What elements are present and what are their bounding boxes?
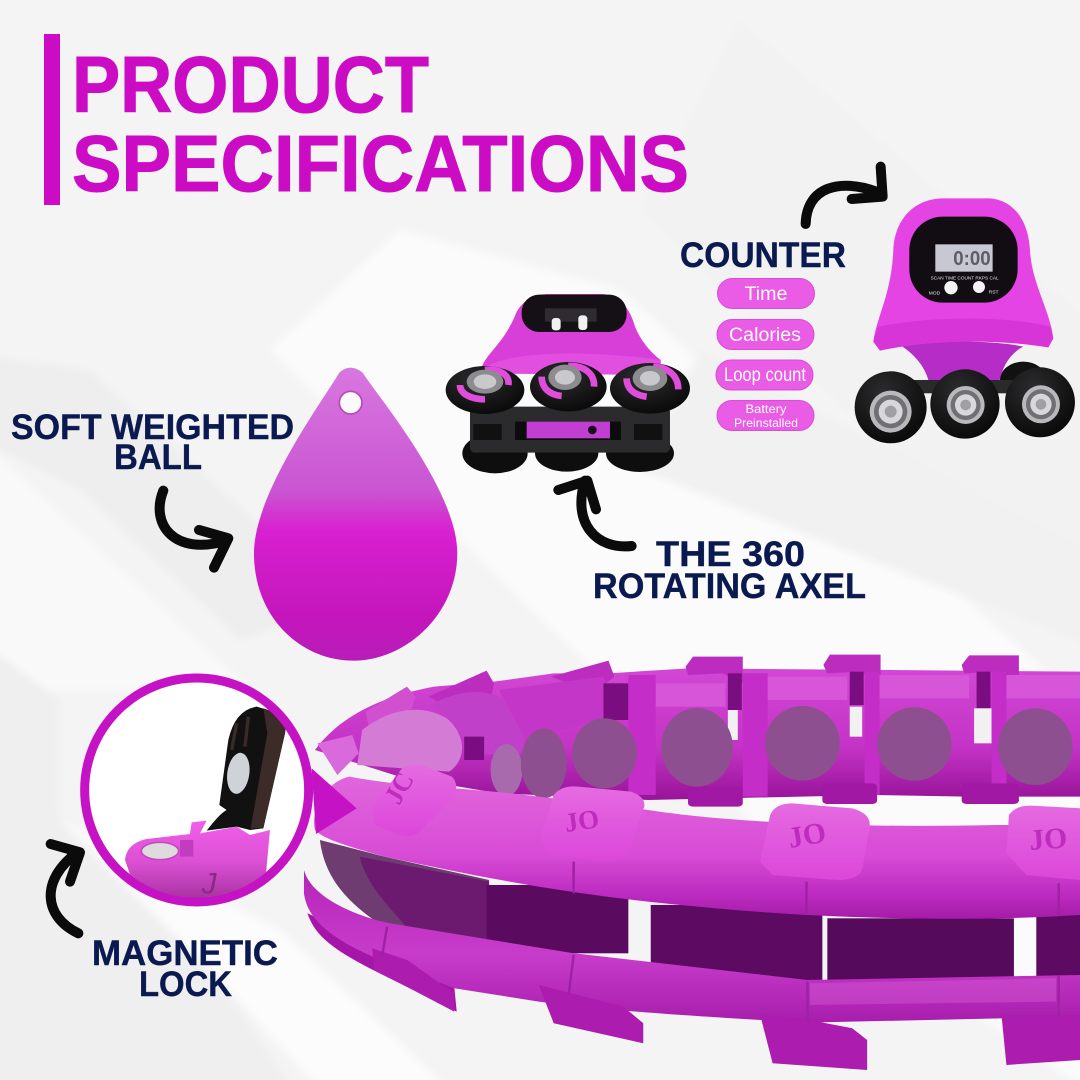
JO tile lettering: JC — [379, 767, 420, 809]
display housing — [909, 217, 1018, 303]
display — [522, 295, 627, 332]
counter device photo illustration: MOD — [929, 290, 941, 296]
pill: battery preinstalled: Battery — [746, 402, 786, 416]
title line 1: PRODUCT — [72, 40, 429, 129]
lock illustration — [125, 707, 285, 903]
lowest left rim — [307, 913, 457, 1012]
lcd labels: SCAN TIME COUNT RKPS CAL — [931, 276, 999, 281]
recesses — [464, 672, 991, 760]
rib highlights on back segments — [648, 675, 1080, 707]
frame — [470, 407, 670, 453]
hula hoop — [304, 655, 1080, 1070]
open flap — [207, 707, 285, 831]
rotating axel photo illustration — [446, 294, 690, 473]
label: the 360 rotating axel — [593, 535, 866, 606]
latch — [527, 422, 610, 438]
pill: time — [718, 278, 814, 308]
top tabs — [366, 655, 1019, 732]
label: magnetic lock: MAGNETIC — [92, 934, 278, 973]
ring and white disc — [85, 678, 309, 902]
buttons — [944, 281, 958, 294]
lower discs — [462, 433, 528, 473]
counter device photo illustration: RST — [989, 289, 999, 295]
wheels with rotation arrows — [446, 362, 690, 414]
label: the 360 rotating axel: ROTATING AXEL — [593, 567, 866, 606]
lower band — [304, 870, 1080, 1023]
lighter inner swirl — [357, 710, 462, 772]
bottom back tabs — [688, 783, 1019, 807]
band seams — [382, 862, 1059, 1022]
label: soft weighted ball: BALL — [114, 438, 202, 477]
wheels — [855, 367, 1075, 443]
gaps in back arc — [728, 707, 992, 743]
dark interior panels — [320, 840, 1080, 980]
buttons — [552, 318, 561, 330]
label: soft weighted ball: SOFT WEIGHTED — [11, 408, 294, 447]
label: the 360 rotating axel: THE 360 — [656, 535, 805, 574]
hula hoop: JO — [563, 803, 601, 838]
pill: loop count: Loop count — [724, 365, 807, 386]
label: magnetic lock — [92, 934, 278, 1004]
pointer triangle — [312, 768, 357, 834]
title line 2: SPECIFICATIONS — [72, 119, 689, 208]
lock illustration: J — [201, 867, 218, 900]
pill: calories — [717, 320, 814, 350]
lock base — [125, 821, 270, 903]
lcd — [935, 244, 993, 272]
pill: battery preinstalled: Preinstalled — [734, 416, 798, 430]
label: counter: COUNTER — [680, 236, 846, 275]
flap magnet — [227, 752, 250, 794]
back arc of hoop — [315, 668, 1080, 800]
hula hoop: JO — [1028, 822, 1068, 857]
lower tabs — [372, 948, 1080, 1070]
title accent bar — [44, 34, 60, 205]
arrow: to magnetic lock — [51, 844, 80, 933]
weighted ball — [254, 368, 457, 661]
JO tile shapes — [317, 735, 1080, 880]
magnetic lock callout — [85, 678, 357, 903]
body — [873, 198, 1053, 351]
title — [44, 34, 689, 208]
neck — [900, 341, 1023, 387]
pill: calories: Calories — [729, 325, 801, 346]
hula hoop: JO — [786, 817, 829, 855]
weighted balls — [491, 706, 1073, 798]
counter device photo illustration: 0:00 — [953, 247, 991, 270]
rear wheel — [1000, 362, 1047, 398]
arrow: to counter — [806, 167, 883, 224]
pill: time: Time — [744, 284, 788, 305]
segment bands — [628, 672, 1006, 797]
axle bar — [900, 380, 1040, 393]
pill: loop count — [716, 360, 813, 390]
label: soft weighted ball — [11, 408, 294, 477]
bright highlight on lower band — [810, 978, 1056, 1005]
counter device photo illustration — [855, 198, 1075, 443]
pill: battery preinstalled — [717, 400, 814, 430]
arrow: to weighted ball — [160, 491, 228, 568]
label: magnetic lock: LOCK — [139, 965, 232, 1004]
counter feature pills — [716, 278, 814, 430]
arrow: to rotating axel — [558, 481, 632, 546]
upper front band — [314, 777, 1080, 919]
body — [480, 294, 661, 375]
